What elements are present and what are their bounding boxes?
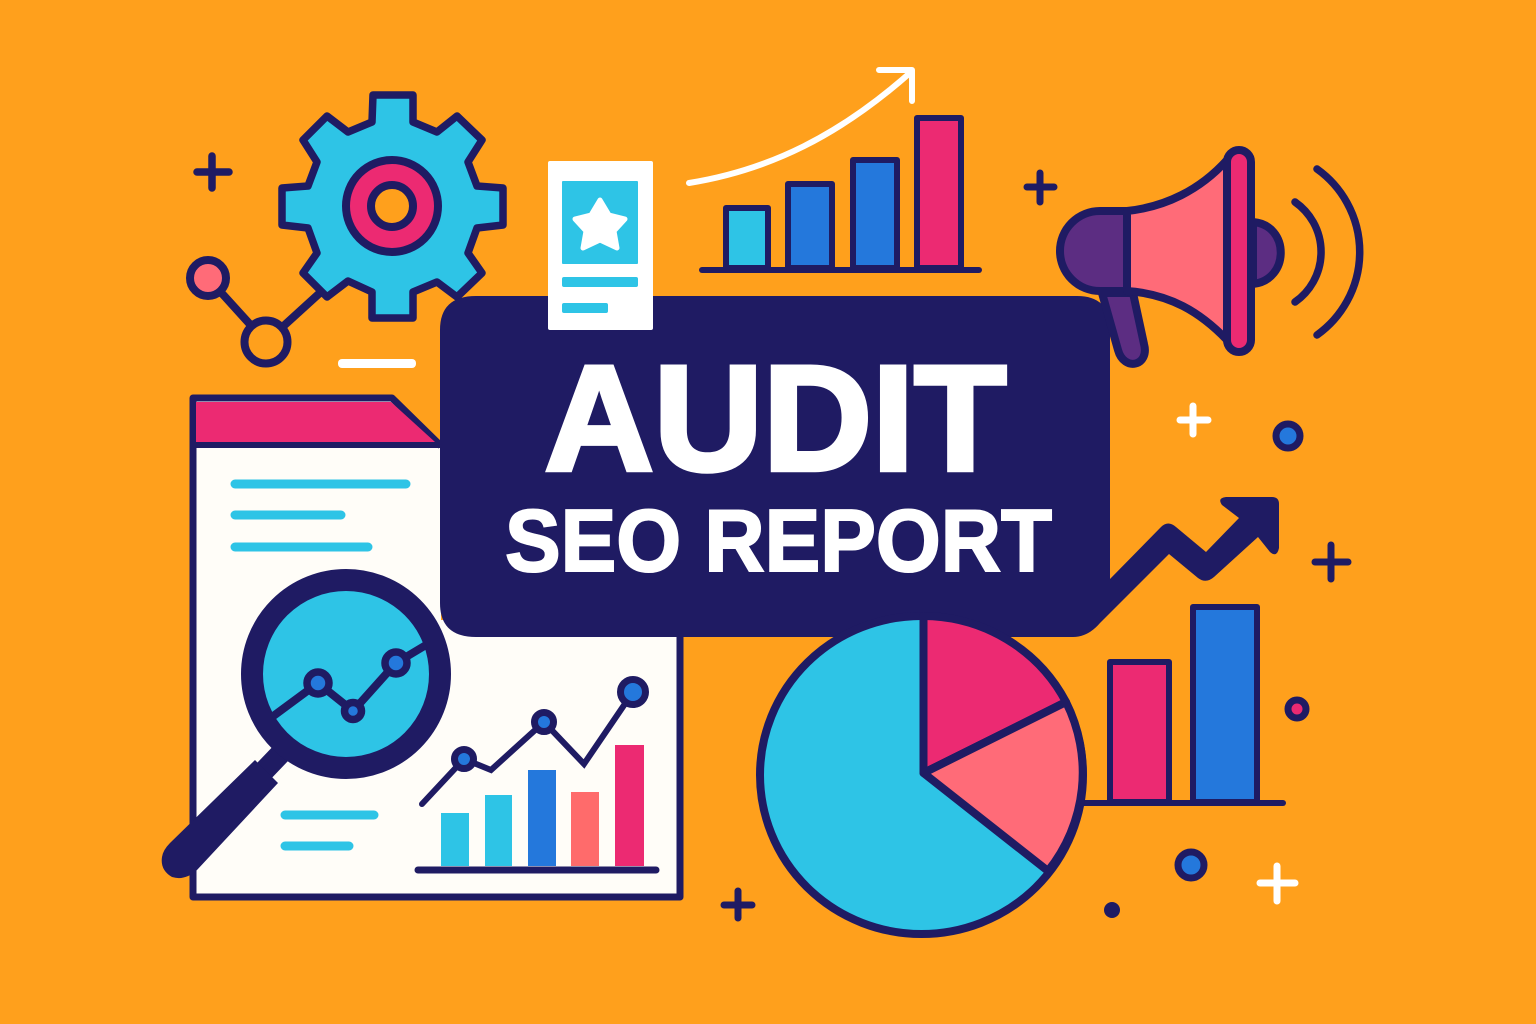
pie chart [760,616,1083,934]
icon: growth arrow [689,70,912,183]
bar chart: document [418,680,656,870]
bar chart: top [702,118,979,270]
decoration: plus near megaphone [1027,173,1054,202]
icon: megaphone [1060,150,1360,364]
decoration: plus top left [197,156,229,188]
icon: star card [548,161,653,330]
icon: magnifying glass [162,580,440,878]
document: report page [193,398,680,897]
bar chart: lower right [1070,607,1283,803]
document text lines [235,484,406,846]
decoration: white dash [338,359,416,368]
icon: gear [282,95,503,318]
title panel with zigzag arrow [440,296,1279,637]
decoration: plus and dots [724,406,1348,918]
icon: connected nodes line [190,260,322,364]
subtitle: seo report: SEO REPORT [505,491,1052,590]
title: audit: AUDIT [544,334,1006,502]
